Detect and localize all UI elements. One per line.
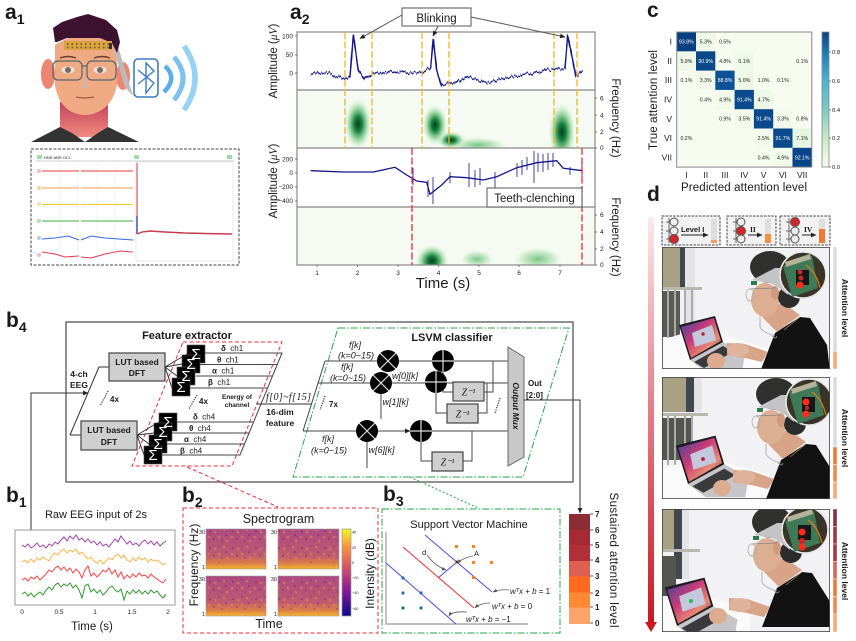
LSVM classifier block: Output Mux	[511, 382, 521, 431]
dashed box	[183, 508, 378, 633]
scale numbers: 1	[595, 603, 600, 612]
LUT DFT blocks: DFT	[101, 437, 118, 447]
level bar: photo IV	[833, 509, 837, 632]
sigma blocks: Σ	[158, 424, 168, 441]
heatmap tick labels: 1	[274, 612, 277, 618]
axis labels and ticks: 200	[282, 156, 293, 164]
cell percentages: 0.4%	[700, 97, 712, 103]
cell percentages: 0.4%	[758, 155, 770, 161]
matrix axis labels: VI	[664, 133, 672, 143]
intensity colorbar: −40	[352, 591, 358, 595]
cell percentages: 91.4%	[756, 117, 771, 123]
weight and feature labels: f[k]	[341, 362, 353, 372]
y-axis titles: Amplitude (μV)	[268, 23, 280, 98]
panel c: confusion matrix	[647, 0, 841, 194]
band labels: α ch4	[184, 435, 207, 444]
heatmap tick labels: 30	[199, 577, 205, 583]
cell percentages: 91.7%	[776, 136, 791, 142]
icon: bluetooth	[134, 59, 158, 97]
z-inverse delay blocks: Z⁻¹	[456, 410, 469, 420]
y-axis titles: Frequency (Hz)	[609, 78, 621, 158]
matrix axis titles: Predicted attention level	[681, 182, 807, 194]
ticks and axis title: 0.5	[54, 609, 64, 616]
LSVM classifier block	[293, 328, 569, 477]
chart axes	[386, 532, 528, 624]
cell percentages	[679, 40, 810, 161]
feature extractor block: Feature extractor	[142, 330, 233, 342]
panel b1: raw EEG	[6, 484, 175, 633]
cell percentages: 5.9%	[680, 59, 693, 65]
EEG traces	[22, 535, 166, 600]
level bar: photo II	[833, 377, 837, 499]
z-inverse delay blocks	[432, 382, 484, 471]
cell percentages: 0.1%	[738, 59, 751, 65]
callout: Teeth-clenching: Teeth-clenching	[494, 193, 575, 205]
matrix axis labels	[662, 36, 807, 180]
weight and feature labels: f[k]	[349, 340, 361, 350]
ticks and axis title: 1.5	[127, 609, 137, 616]
callout: Blinking: Blinking	[416, 13, 457, 25]
LUT DFT blocks: LUT based	[115, 357, 159, 367]
matrix axis titles: True attention level	[648, 50, 660, 150]
cell percentages: 0.1%	[777, 78, 789, 84]
label a1: a	[5, 1, 17, 24]
band labels: α ch1	[212, 366, 235, 376]
y-axis titles: Amplitude (μV)	[268, 143, 280, 218]
weight and feature labels: f[k]	[322, 434, 334, 444]
axis titles: Time	[255, 617, 283, 631]
heatmaps	[206, 529, 339, 616]
LSVM classifier block: Out	[528, 379, 542, 388]
scale numbers: 3	[595, 572, 600, 581]
intensity colorbar: −60	[352, 607, 358, 611]
label b4: b	[6, 309, 19, 332]
label b4: 4	[19, 319, 27, 335]
feature extractor block	[70, 330, 282, 466]
sigma blocks: Σ	[148, 447, 158, 464]
attention level captions: Attention level	[840, 409, 850, 467]
LUT DFT blocks: LUT based	[87, 425, 131, 435]
scale numbers: 7	[595, 510, 600, 519]
attention level captions	[840, 279, 850, 600]
feature extractor block: Energy of	[222, 394, 253, 401]
axis labels and ticks: 100	[282, 34, 293, 40]
axis labels and ticks: 2	[356, 270, 360, 277]
arrow: increasing attention	[645, 217, 657, 632]
feature extractor block: channel	[225, 402, 249, 409]
matrix axis titles	[648, 50, 807, 194]
matrix axis labels: I	[685, 170, 688, 180]
weight and feature labels	[311, 340, 419, 456]
ticks and axis title: 0	[20, 609, 24, 616]
matrix axis labels: V	[666, 114, 672, 124]
icon: LED level IV: IV	[804, 225, 813, 234]
level bar: photo I	[833, 247, 837, 369]
cell percentages: 4.8%	[719, 59, 731, 65]
sigma blocks	[144, 345, 205, 464]
title: Spectrogram	[243, 512, 314, 526]
colorbar: 0.8	[832, 50, 840, 56]
icon: LED level I	[662, 216, 720, 245]
ticks and axis title: 1	[93, 609, 97, 616]
cell percentages: 4.7%	[758, 97, 770, 103]
panel: mobile app screenshot: HNR ABR OCI.	[44, 155, 71, 160]
phase markers: yellow and red dashes	[345, 32, 582, 265]
matrix axis labels: IV	[664, 94, 672, 104]
label b1: 1	[19, 494, 27, 510]
matrix axis labels: III	[721, 170, 729, 180]
scale numbers: 6	[595, 526, 600, 535]
heatmap tick labels: 30	[271, 530, 277, 536]
arrow: EEG input into feature extractor	[31, 393, 88, 530]
LSVM classifier block: 7x	[329, 400, 338, 409]
signal: blinking trace	[311, 35, 583, 86]
label b2: 2	[195, 494, 203, 510]
colorbar: 0.4	[832, 108, 841, 114]
intensity colorbar: 40	[352, 530, 356, 534]
weight and feature labels: w[6][k]	[368, 445, 395, 455]
LUT DFT blocks: DFT	[129, 368, 146, 378]
panel a2: EOG signals and spectrograms	[268, 1, 621, 292]
panel a1: wearable and app	[5, 1, 239, 265]
scale numbers: 5	[595, 541, 600, 550]
data points	[401, 545, 493, 610]
cell percentages: 0.9%	[719, 117, 731, 123]
matrix axis labels: II	[667, 56, 672, 66]
axis titles: Intensity (dB)	[363, 538, 377, 609]
ticks and axis title	[20, 609, 170, 616]
cell percentages: 90.9%	[698, 59, 713, 65]
weight and feature labels: w[1][k]	[382, 397, 409, 407]
dash-dot box	[382, 509, 560, 633]
icon: LED level I: Level I	[681, 225, 704, 234]
decision lines	[386, 535, 492, 624]
annotations: wᵀx + b = −1	[466, 615, 511, 624]
matrix axis labels: V	[761, 170, 767, 180]
band labels: δ ch1	[221, 344, 244, 353]
band labels: θ ch4	[189, 424, 211, 433]
panel b4: hardware block diagram	[6, 309, 573, 482]
connector: feature extractor to spectrogram	[187, 467, 278, 507]
output mux	[508, 347, 524, 466]
cell percentages: 5.0%	[738, 78, 751, 84]
axis titles	[187, 524, 377, 631]
panel b1: raw EEG: Time (s)	[71, 621, 113, 633]
axis titles: Frequency (Hz)	[187, 524, 201, 606]
band labels: β ch4	[180, 446, 203, 456]
title: Raw EEG input of 2s	[45, 509, 148, 521]
adders	[410, 350, 454, 442]
band labels: θ ch1	[217, 356, 239, 364]
signal: teeth-clenching trace	[311, 151, 583, 204]
intensity colorbar: 0	[352, 561, 354, 565]
z-inverse delay blocks: Z⁻¹	[462, 388, 475, 398]
icon: LED level II: II	[750, 225, 756, 234]
sigma blocks: Σ	[163, 414, 173, 431]
title: Support Vector Machine	[410, 519, 528, 531]
feature extractor block: 4-ch	[70, 369, 88, 379]
matrix axis labels: I	[670, 36, 672, 46]
connector: classifier to SVM	[410, 477, 478, 508]
cell percentages: 0.8%	[796, 117, 808, 123]
axis labels and ticks: −200	[278, 184, 293, 191]
cell percentages: 88.8%	[718, 78, 733, 84]
cell percentages: 0.5%	[719, 40, 731, 46]
spectrogram: blinking	[298, 90, 594, 148]
arrow: output to level scale	[524, 400, 580, 513]
axis labels and ticks: 0	[600, 262, 604, 269]
cell percentages: 91.4%	[737, 97, 752, 103]
axis labels and ticks: 7	[558, 270, 562, 277]
axis labels and ticks: 6	[600, 212, 604, 219]
scale numbers: 0	[595, 619, 600, 628]
scale numbers: 4	[595, 556, 600, 565]
colorbar	[822, 32, 841, 171]
matrix axis labels: VII	[662, 152, 672, 162]
trace frame	[15, 530, 175, 605]
sigma blocks: Σ	[176, 379, 186, 396]
sigma blocks: Σ	[181, 368, 191, 385]
16-dim feature link	[256, 392, 312, 428]
annotations: wᵀx + b = 1	[510, 587, 551, 596]
axis labels and ticks: 1	[315, 270, 319, 277]
heatmap cells	[677, 32, 812, 167]
axis labels and ticks: 2	[600, 129, 604, 136]
heatmap tick labels: 30	[199, 530, 205, 536]
outer frame	[66, 322, 573, 482]
weight and feature labels: (k=0~15)	[338, 350, 374, 360]
16-dim feature link: f[0]~f[15]	[266, 392, 311, 403]
colorbar: 0.0	[832, 165, 840, 171]
sigma blocks: Σ	[191, 346, 201, 363]
axis labels and ticks: 0	[600, 145, 604, 152]
spectrogram: teeth clenching	[298, 208, 594, 264]
heatmap tick labels: 1	[202, 565, 205, 571]
band labels: β ch1	[208, 378, 231, 387]
annotations: wᵀx + b = 0	[492, 602, 533, 611]
panel: mobile app screenshot	[31, 149, 239, 265]
cell percentages: 5.3%	[700, 40, 712, 46]
scale bar	[569, 514, 590, 624]
attention level captions: Attention level	[840, 279, 850, 337]
axis labels and ticks: 4	[600, 112, 604, 120]
feature extractor block: EEG	[70, 380, 88, 390]
label a1: 1	[17, 11, 25, 27]
cell percentages: 0.1%	[680, 78, 693, 84]
callout: Teeth-clenching	[487, 188, 582, 207]
scale numbers	[595, 510, 600, 628]
label b2: b	[182, 484, 195, 507]
heatmap tick labels	[199, 530, 277, 618]
cell percentages: 4.9%	[777, 155, 789, 161]
scale numbers: 2	[595, 589, 600, 598]
cell percentages: 4.9%	[719, 97, 731, 103]
intensity colorbar	[342, 529, 358, 616]
y-axis titles: Frequency (Hz)	[609, 197, 621, 277]
axis labels and ticks: 4	[437, 270, 441, 277]
cell percentages: 7.1%	[796, 136, 808, 142]
axis labels and ticks: −400	[278, 198, 293, 205]
scale title: Sustained attention level	[607, 492, 619, 628]
colorbar: 0.2	[832, 136, 840, 142]
LUT DFT blocks	[81, 353, 165, 450]
axis labels and ticks: 6	[517, 270, 521, 277]
heatmap tick labels: 30	[271, 577, 277, 583]
cell percentages: 2.5%	[758, 136, 770, 142]
sigma blocks: Σ	[186, 356, 196, 373]
panel b3: support vector machine	[382, 483, 560, 633]
LSVM classifier block: [2:0]	[526, 391, 543, 400]
feature extractor block: 4x	[110, 395, 119, 404]
16-dim feature link: 16-dim	[266, 407, 294, 417]
label a2: a	[290, 1, 302, 24]
axis labels and ticks: 5	[477, 270, 481, 277]
panel d: attention level demonstrations	[645, 183, 850, 639]
intensity colorbar: −20	[352, 576, 358, 580]
matrix axis labels: III	[665, 75, 672, 85]
label b1: b	[6, 484, 19, 507]
matrix axis labels: VII	[797, 170, 807, 180]
axis labels and ticks: 0	[289, 170, 293, 177]
attention level captions: Attention level	[840, 542, 850, 600]
heatmap tick labels: 1	[274, 565, 277, 571]
axis labels and ticks: 3	[396, 270, 400, 277]
label a2: 2	[302, 11, 310, 27]
icon: LED level II	[727, 216, 776, 245]
16-dim feature link: feature	[266, 418, 294, 428]
photo: level II subject	[662, 377, 836, 499]
callout: Blinking	[360, 8, 565, 38]
multipliers	[356, 350, 399, 442]
colorbar: 0.6	[832, 79, 840, 85]
band labels	[180, 344, 244, 456]
label d: d	[647, 183, 660, 206]
icon: LED level IV	[780, 216, 830, 245]
matrix axis labels: VI	[779, 170, 787, 180]
icon: wireless signal arcs	[164, 46, 195, 110]
icon: cartoon head with forehead EEG patch	[31, 14, 139, 142]
band labels: δ ch4	[193, 412, 216, 422]
cell percentages: 3.3%	[777, 117, 789, 123]
panel b2: spectrogram	[182, 484, 378, 633]
cell percentages: 3.3%	[700, 78, 712, 84]
matrix axis labels: IV	[740, 170, 749, 180]
label b3: b	[383, 483, 396, 506]
annotations	[422, 548, 551, 624]
annotations: A	[474, 549, 479, 558]
LSVM classifier block: LSVM classifier	[411, 332, 493, 344]
intensity colorbar: 20	[352, 546, 356, 550]
z-inverse delay blocks: Z⁻¹	[441, 458, 454, 468]
axis labels and ticks: 0	[289, 70, 293, 78]
sigma blocks: Σ	[153, 436, 163, 453]
cell percentages: 92.1%	[795, 155, 810, 161]
photo: level IV subject	[662, 506, 832, 639]
weight and feature labels: (k=0~15)	[311, 446, 347, 456]
photo: level I subject	[662, 247, 830, 372]
feature extractor block: 4x	[199, 397, 208, 406]
axis labels and ticks: 4	[600, 229, 604, 236]
heatmap tick labels: 1	[202, 612, 205, 618]
cell percentages: 93.8%	[679, 40, 694, 46]
annotations: d	[422, 548, 426, 557]
cell percentages: 0.2%	[680, 136, 693, 142]
label b3: 3	[396, 493, 404, 509]
axis labels and ticks	[278, 34, 604, 277]
axis labels and ticks: 2	[600, 246, 604, 253]
cell percentages: 0.1%	[796, 59, 808, 65]
cell percentages: 3.5%	[738, 117, 751, 123]
axis labels and ticks: 50	[286, 52, 293, 59]
weight and feature labels: w[0][k]	[392, 371, 419, 381]
legend: sustained attention level scale	[569, 492, 619, 628]
cell percentages: 1.0%	[758, 78, 770, 84]
x-axis title: Time (s)	[416, 275, 470, 292]
ticks and axis title: 2	[166, 609, 170, 616]
weight and feature labels: (k=0~15)	[330, 373, 366, 383]
matrix axis labels: II	[703, 170, 708, 180]
y-axis titles	[268, 23, 621, 277]
chart frames	[297, 32, 595, 265]
axis labels and ticks: 6	[600, 96, 604, 102]
